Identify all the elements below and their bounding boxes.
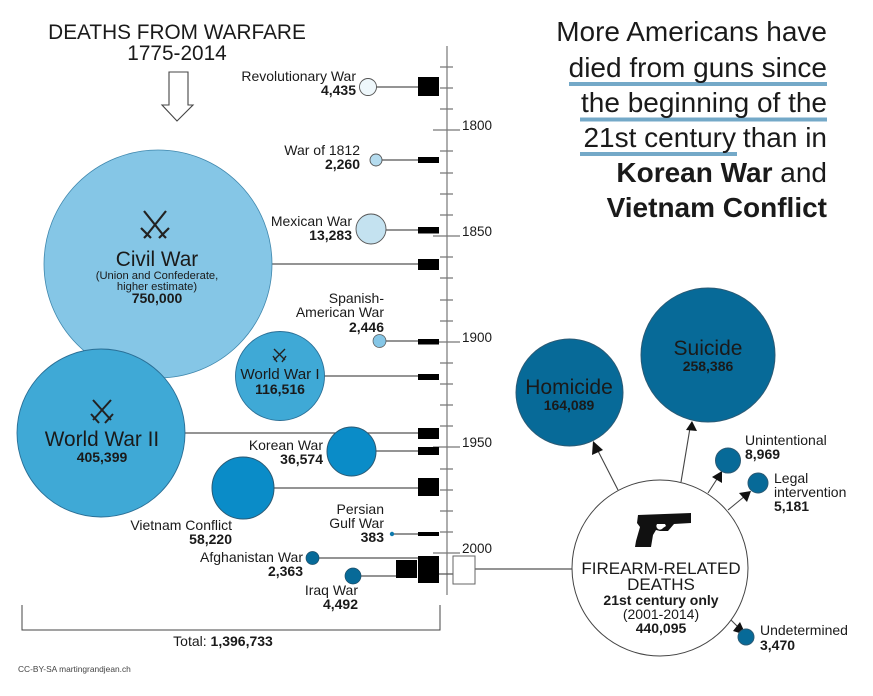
circle: undetermined — [738, 629, 754, 645]
arrow: down — [162, 72, 193, 121]
circle: persian gulf war — [390, 532, 394, 536]
timeline axis: 1900 — [462, 330, 492, 345]
title: 21st century — [583, 122, 736, 153]
label: undetermined — [760, 622, 848, 653]
timeline axis: 2000 — [462, 541, 492, 556]
circle: firearm-related deaths: (2001-2014) — [623, 606, 699, 622]
label: war of 1812 — [284, 142, 360, 172]
circle: iraq war — [345, 568, 361, 584]
duration bar: firearm deaths — [453, 556, 475, 584]
title — [556, 16, 827, 223]
duration bars — [396, 77, 439, 583]
timeline axis: 1950 — [462, 435, 492, 450]
label: spanish-american war: Spanish- — [329, 290, 384, 306]
label: vietnam conflict: Vietnam Conflict — [130, 517, 232, 533]
label: persian gulf war: 383 — [361, 529, 384, 545]
arrows: firearm categories — [592, 421, 751, 635]
circle: civil war: (Union and Confederate, — [96, 270, 218, 282]
title underlines — [569, 84, 827, 154]
label: unintentional: Unintentional — [745, 432, 827, 448]
connector lines — [184, 87, 572, 576]
label: persian gulf war — [329, 501, 384, 545]
circle: world war II: World War II — [45, 428, 159, 451]
circle: revolutionary war — [360, 78, 376, 96]
circle: suicide — [641, 288, 775, 422]
circle: civil war: Civil War — [116, 248, 198, 271]
circle: suicide: Suicide — [674, 337, 742, 360]
label: afghanistan war: 2,363 — [268, 563, 303, 579]
circle: world war I — [236, 332, 324, 420]
title: the beginning of the — [581, 87, 827, 118]
timeline axis: 1850 — [462, 224, 492, 239]
circle: mexican war — [356, 214, 386, 244]
label: iraq war — [305, 582, 358, 612]
label: unintentional — [745, 432, 827, 462]
circle: afghanistan war — [306, 552, 319, 564]
heading: deaths from warfare: 1775-2014 — [127, 42, 227, 65]
circle: world war I: World War I — [240, 366, 320, 383]
label: war of 1812: 2,260 — [325, 156, 360, 172]
icon: crossed swords — [141, 211, 169, 238]
label: legal intervention: intervention — [774, 484, 846, 500]
label: iraq war: 4,492 — [323, 596, 358, 612]
circle: war of 1812 — [370, 154, 382, 166]
timeline axis: 1800 — [462, 118, 492, 133]
label: legal intervention: 5,181 — [774, 498, 809, 514]
circle: firearm-related deaths: FIREARM-RELATED — [581, 559, 741, 578]
label: war of 1812: War of 1812 — [284, 142, 360, 158]
label: persian gulf war: Persian — [337, 501, 384, 517]
icon: crossed swords — [91, 400, 113, 423]
label: legal intervention: Legal — [774, 470, 808, 486]
circle: world war I: 116,516 — [255, 381, 305, 397]
circle: world war II — [17, 349, 185, 517]
circle: civil war: higher estimate) — [117, 281, 197, 293]
title: died from guns since — [569, 52, 827, 83]
circle: suicide: 258,386 — [683, 358, 734, 374]
circle: legal intervention — [748, 473, 768, 493]
label: persian gulf war: Gulf War — [329, 515, 384, 531]
label: korean war: 36,574 — [280, 451, 323, 467]
label: spanish-american war — [296, 290, 384, 335]
credit: CC-BY-SA martingrandjean.ch — [18, 664, 131, 674]
circle: world war II: 405,399 — [77, 449, 128, 465]
circle: firearm-related deaths — [572, 480, 748, 656]
circle: firearm-related deaths: DEATHS — [627, 575, 695, 594]
label: mexican war: Mexican War — [271, 213, 352, 229]
label: undetermined: 3,470 — [760, 637, 795, 653]
label: undetermined: Undetermined — [760, 622, 848, 638]
label: vietnam conflict — [130, 517, 232, 547]
circle: firearm-related deaths: 440,095 — [636, 620, 687, 636]
title: Vietnam Conflict — [607, 192, 827, 223]
label: revolutionary war: 4,435 — [321, 82, 356, 98]
title: than in — [743, 122, 827, 153]
total bracket — [22, 605, 440, 630]
heading: deaths from warfare — [48, 21, 306, 65]
total label: Total: 1,396,733 — [173, 633, 273, 649]
label: afghanistan war: Afghanistan War — [200, 549, 303, 565]
circle: homicide: 164,089 — [544, 397, 595, 413]
label: revolutionary war — [241, 68, 356, 98]
label: afghanistan war — [200, 549, 303, 579]
icon: crossed swords — [273, 349, 286, 362]
label: mexican war: 13,283 — [309, 227, 352, 243]
label: spanish-american war: 2,446 — [349, 319, 384, 335]
circle: civil war — [44, 150, 272, 378]
circle: firearm-related deaths: 21st century only — [603, 592, 719, 608]
circle: korean war — [327, 427, 376, 476]
label: unintentional: 8,969 — [745, 446, 780, 462]
circle: homicide — [516, 339, 623, 446]
label: korean war — [249, 437, 323, 467]
timeline axis — [433, 46, 492, 595]
circle: civil war: 750,000 — [132, 290, 183, 306]
label: korean war: Korean War — [249, 437, 323, 453]
label: mexican war — [271, 213, 352, 243]
circle: unintentional — [716, 448, 740, 473]
icon: handgun — [635, 513, 691, 547]
label: revolutionary war: Revolutionary War — [241, 68, 356, 84]
label: iraq war: Iraq War — [305, 582, 358, 598]
title: Korean War and — [616, 157, 827, 188]
circle: homicide: Homicide — [525, 376, 613, 399]
label: vietnam conflict: 58,220 — [189, 531, 232, 547]
title: More Americans have — [556, 16, 827, 47]
circle: vietnam conflict — [212, 457, 274, 519]
heading: deaths from warfare: DEATHS FROM WARFARE — [48, 21, 306, 44]
circle: spanish-american war — [373, 334, 386, 348]
label: legal intervention — [774, 470, 846, 514]
label: spanish-american war: American War — [296, 304, 384, 320]
